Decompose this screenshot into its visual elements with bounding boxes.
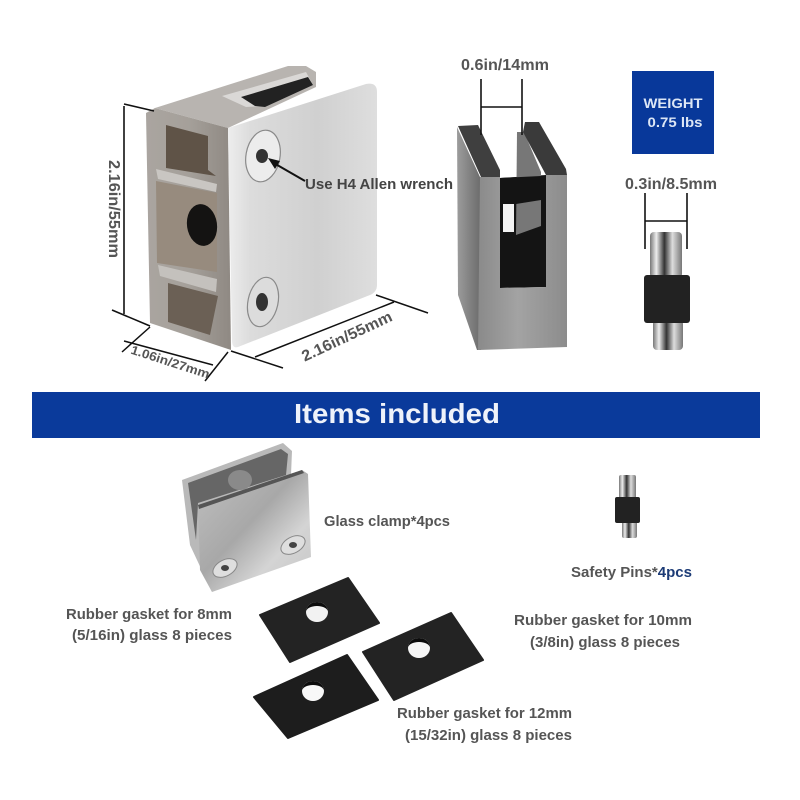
height label: 2.16in/55mm — [105, 160, 122, 258]
8mm gasket label — [66, 607, 232, 644]
gap width line — [481, 79, 522, 135]
rubber gasket top — [260, 578, 379, 662]
8mm gasket label: (5/16in) glass 8 pieces — [72, 628, 232, 644]
weight badge — [632, 71, 714, 154]
items included banner: Items included — [294, 398, 500, 429]
width label: 2.16in/55mm — [299, 309, 395, 365]
width dimension — [231, 295, 428, 368]
12mm gasket label: (15/32in) glass 8 pieces — [405, 728, 572, 744]
rear plate — [182, 443, 292, 592]
side rib bottom — [158, 265, 217, 292]
left plate top edge — [458, 125, 500, 177]
front plate — [198, 470, 311, 592]
clamp top face — [155, 66, 316, 128]
pin upper shaft — [650, 232, 682, 278]
glass clamp label: Glass clamp*4pcs — [324, 514, 450, 530]
wrench label: Use H4 Allen wrench — [305, 176, 453, 193]
10mm gasket label: (3/8in) glass 8 pieces — [530, 635, 680, 651]
pin dimension lines — [645, 193, 687, 249]
wrench arrow — [268, 158, 305, 181]
cross bolt — [500, 176, 541, 204]
glass gap clamp photo — [457, 57, 567, 350]
inner wall — [516, 132, 541, 235]
10mm gasket label: Rubber gasket for 10mm — [514, 613, 692, 629]
clamp side face — [146, 108, 231, 350]
right plate top edge — [523, 122, 567, 175]
pin rubber sleeve — [644, 275, 690, 323]
top screw — [242, 127, 284, 185]
12mm gasket label — [397, 706, 572, 744]
clamp front — [478, 175, 567, 350]
side rib top — [156, 169, 217, 192]
depth label: 1.06in/27mm — [129, 343, 211, 382]
pin lower shaft — [653, 320, 683, 350]
weight badge: WEIGHT — [644, 95, 703, 111]
bolt — [228, 470, 252, 490]
rubber gasket bottom — [254, 655, 378, 738]
small safety pin item — [615, 475, 640, 538]
safety pins label: Safety Pins*4pcs — [571, 565, 692, 581]
side cavity top — [166, 125, 216, 176]
weight badge: 0.75 lbs — [648, 114, 703, 130]
dark interior — [500, 175, 546, 288]
gap label: 0.6in/14mm — [461, 57, 549, 74]
rubber gasket right — [363, 613, 483, 700]
depth dimension — [122, 327, 228, 381]
clamp front face — [228, 84, 377, 347]
bottom screw — [243, 274, 283, 330]
pin diameter label: 0.3in/8.5mm — [625, 176, 717, 193]
main clamp photo with dimensions — [105, 66, 453, 382]
top glass slot — [222, 72, 313, 107]
side cavity bottom — [168, 283, 218, 335]
safety pin with dimension — [625, 176, 717, 350]
left plate side — [457, 127, 481, 350]
8mm gasket label: Rubber gasket for 8mm — [66, 607, 232, 623]
height dimension — [112, 104, 154, 326]
side hole — [184, 202, 220, 248]
items included banner — [32, 392, 760, 438]
side cavity middle — [156, 181, 217, 272]
glass clamp item — [182, 443, 311, 592]
10mm gasket label — [514, 613, 692, 651]
12mm gasket label: Rubber gasket for 12mm — [397, 706, 572, 722]
white window — [503, 204, 514, 232]
front screws — [210, 555, 240, 581]
